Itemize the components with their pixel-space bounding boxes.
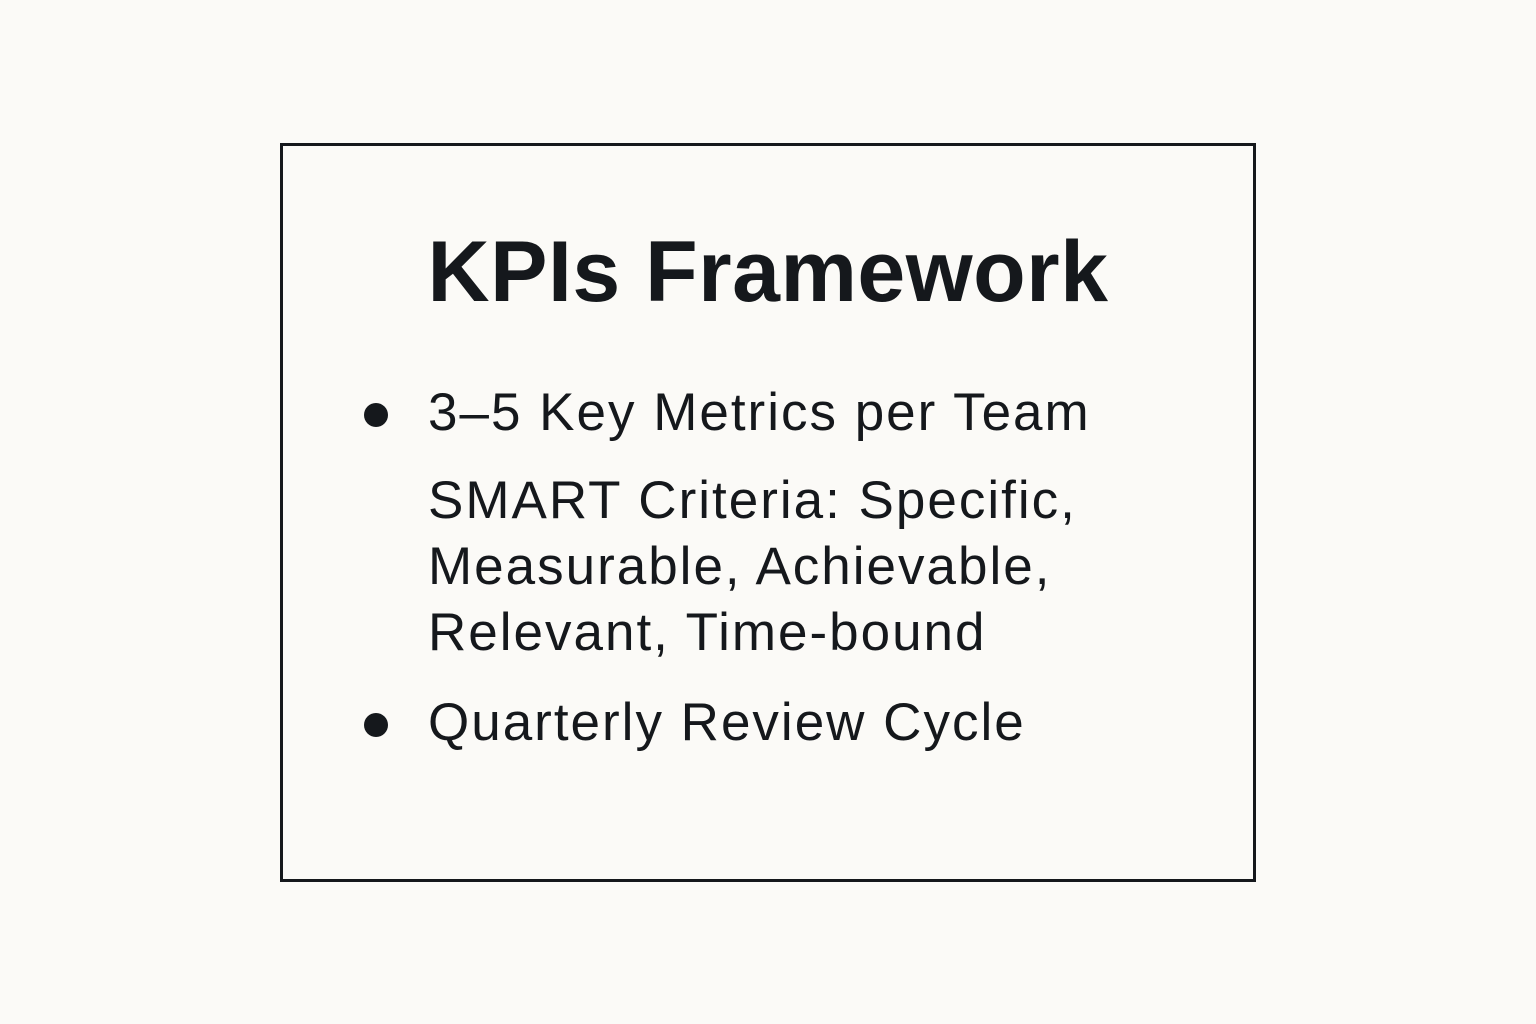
text block: SMART criteria: SMART Criteria: Specific, bbox=[428, 471, 1077, 530]
bullet 2 bbox=[364, 693, 1026, 752]
text: review cycle: Quarterly Review Cycle bbox=[428, 693, 1026, 752]
text block: SMART criteria: Measurable, Achievable, bbox=[428, 537, 1051, 596]
bullet 1 bbox=[364, 383, 1091, 442]
title: KPIs Framework bbox=[428, 224, 1108, 320]
panel: framework box bbox=[280, 143, 1256, 882]
text block: SMART criteria: Relevant, Time-bound bbox=[428, 603, 987, 662]
text: key metrics: 3–5 Key Metrics per Team bbox=[428, 383, 1091, 442]
text block: SMART criteria bbox=[428, 471, 1077, 662]
icon: bullet dot bbox=[364, 713, 388, 737]
icon: bullet dot bbox=[364, 403, 388, 427]
